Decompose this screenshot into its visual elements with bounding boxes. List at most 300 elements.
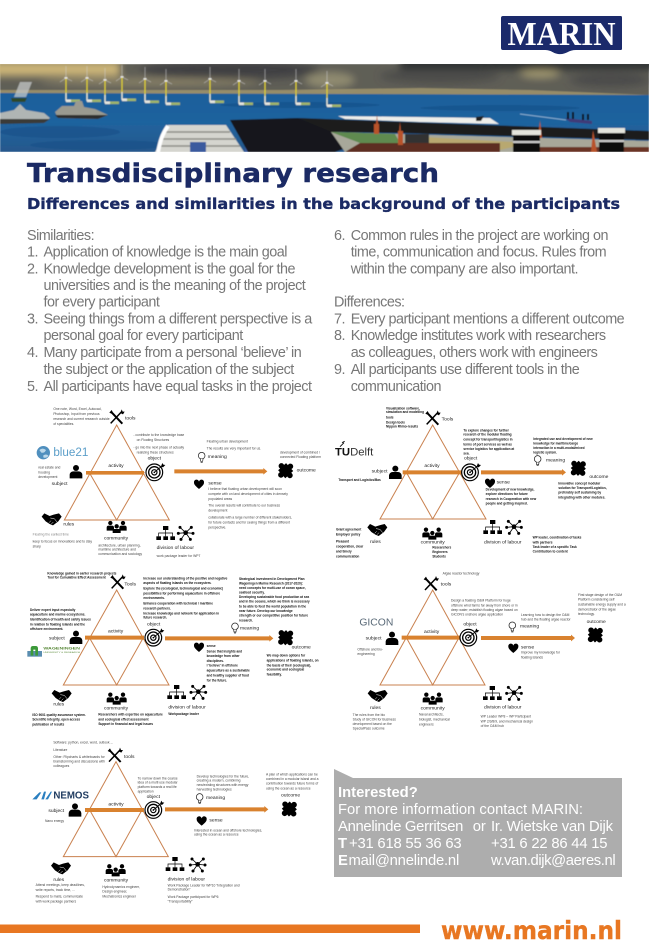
- sense note: populated areas: [208, 497, 233, 501]
- division note: with partners: [532, 540, 553, 544]
- community note: Hydrodynamics engineer,: [102, 885, 140, 889]
- text block: common rules and differences: Differences:: [334, 295, 405, 311]
- icon: target: [460, 628, 479, 646]
- subject note: housing: [38, 470, 50, 474]
- label: meaning: meaning: [206, 795, 225, 801]
- rules note: development based on the: [353, 722, 392, 726]
- arrow: activity to object: [402, 636, 462, 640]
- tools note: Design tools: [386, 420, 405, 424]
- label: meaning: meaning: [240, 626, 259, 632]
- sense note: and healthy supplier of food: [207, 673, 249, 677]
- icon: rules handshake: [42, 513, 62, 525]
- icon: tools: [424, 576, 439, 590]
- label: tools: tools: [441, 582, 452, 588]
- website url: www.marin.nl: [441, 916, 622, 945]
- object note: Increase our understanding of the positive and negative: [143, 576, 228, 580]
- text block: common rules and differences: as colleagues, others work with engineers: [351, 345, 598, 361]
- icon: community people: [107, 521, 127, 533]
- arrow: object to outcome: [481, 469, 566, 476]
- label: subject: subject: [48, 808, 65, 814]
- icon: org chart: [483, 520, 502, 534]
- sense note: for future contacts and for seeing things from a different: [208, 520, 290, 524]
- meaning note: need concepts for multi-use of ocean space,: [239, 586, 306, 590]
- object note: on Floating Structures: [137, 438, 170, 442]
- icon: org chart: [156, 526, 175, 540]
- icon: rules handshake: [367, 524, 387, 536]
- text block: similarities: Similarities:: [27, 228, 94, 244]
- division note: WP 2/3/8/9, and mechanical design: [481, 720, 533, 724]
- meaning note: interaction in a multi-modal/mixed: [533, 446, 585, 450]
- label: community: community: [421, 540, 445, 546]
- label: meaning: meaning: [520, 623, 539, 629]
- icon: meaning bulb: [196, 794, 203, 804]
- panel: contact box: [334, 769, 622, 877]
- meaning note: harvesting technologies: [197, 787, 232, 791]
- tools note: Nippon Rhino-results: [386, 424, 418, 428]
- icon: community people: [107, 692, 127, 705]
- object note: GICON’s onshore algae application: [451, 613, 503, 617]
- icon: community people: [422, 527, 442, 540]
- label: tools: tools: [125, 416, 136, 422]
- icon: meaning bulb: [198, 452, 205, 462]
- banner image: offshore floating islands: [0, 58, 649, 152]
- icon: subject person: [69, 803, 81, 817]
- meaning note: knowledge for maritime/cargo: [533, 441, 578, 445]
- icon: tools: [108, 748, 123, 762]
- logo: blue21: [37, 445, 88, 459]
- division note: Work Package participant for WP6: [168, 895, 219, 899]
- icon: outcome puzzle: [273, 625, 299, 651]
- outcome note: sustainable energy supply and a: [578, 603, 626, 607]
- outcome note: integrating with other modules.: [558, 495, 605, 499]
- rules note: Scientific integrity, open access: [32, 717, 80, 721]
- triangle diagram: [63, 762, 168, 857]
- object note: realizing these structures: [137, 450, 174, 454]
- sense note: perspective.: [208, 525, 226, 529]
- label: object: object: [147, 622, 161, 628]
- division note: Demonstration”: [168, 888, 190, 892]
- logo: NEMOS: NEMOS: [53, 791, 90, 802]
- text block: similarities: for every participant: [44, 295, 160, 311]
- tools note: One note, Word, Excel, Autocad,: [53, 407, 102, 411]
- outcome note: Platform considering self: [578, 598, 615, 602]
- outcome note: We map down options for: [267, 653, 306, 657]
- sense note: aquaculture as a sustainable: [207, 668, 250, 672]
- icon: tools: [425, 410, 441, 425]
- meaning note: Developing sustainable food production at sea: [239, 595, 309, 599]
- contact text: w.van.dijk@aeres.nl: [490, 853, 615, 869]
- division note: Workpackage leader: [168, 712, 200, 716]
- footer bar: [0, 924, 420, 933]
- subject note: development: [38, 475, 57, 479]
- text block: similarities: personal goal for every participant: [44, 328, 243, 344]
- outcome note: using the ocean as a resource: [266, 786, 311, 790]
- text block: common rules and differences: communication: [351, 379, 441, 395]
- division note: “Transportability”: [168, 900, 193, 904]
- outcome note: First stage design of the O&M: [578, 593, 622, 597]
- arrow: activity to object: [403, 470, 462, 474]
- object note: future research.: [143, 615, 167, 619]
- icon: target: [146, 463, 165, 481]
- meaning note: and in the oceans, which we think is necessary: [239, 599, 310, 603]
- rules note: The rules from the bio: [353, 713, 385, 717]
- object note: application: [138, 790, 154, 794]
- icon: subject person: [386, 632, 398, 645]
- subject note: real estate and: [38, 466, 61, 470]
- rules note: sharp: [33, 544, 41, 548]
- community note: engineers: [419, 723, 434, 727]
- rules note: and timely: [336, 549, 352, 553]
- panel: blue21 activity system: [33, 407, 321, 558]
- rules note: ISO 9001 quality assurance system.: [32, 713, 86, 717]
- rules note: publication of results: [32, 722, 64, 726]
- division note: work package leader for WP7: [157, 554, 200, 558]
- label: community: community: [104, 877, 129, 883]
- label: activity: activity: [108, 463, 124, 469]
- icon: network hub: [177, 526, 194, 541]
- text block: similarities: 5.: [27, 379, 38, 395]
- meaning note: The results are very important for us.: [207, 446, 261, 450]
- division note: of the O&M hub: [481, 724, 504, 728]
- community note: architecture, urban planning,: [98, 544, 141, 548]
- subject note: engineering: [357, 652, 375, 656]
- sense note: I believe that floating urban development will soon: [208, 487, 282, 491]
- icon: org chart: [483, 686, 502, 700]
- sense note: Improve my knowledge for: [521, 651, 561, 655]
- outcome note: preferably self sustaining by: [558, 490, 601, 494]
- icon: sense heart: [197, 816, 207, 826]
- outcome note: connected Floating platform: [280, 455, 321, 459]
- sense note: Interested in ocean and offshore technologies,: [194, 828, 262, 832]
- label: outcome: outcome: [292, 645, 311, 651]
- object note: platform towards a real life: [138, 785, 177, 789]
- subject note: Transport and Logistics/Bas: [338, 478, 381, 482]
- community note: maritime architecture and: [98, 548, 136, 552]
- meaning note: Learning how to design the O&M: [521, 613, 570, 617]
- label: community: community: [421, 706, 445, 712]
- contact text: T: [338, 836, 347, 852]
- text block: common rules and differences: Every participant mentions a different outcome: [351, 311, 625, 327]
- rules note: keep to focus on innovations and to stay: [33, 539, 92, 543]
- label: activity: activity: [424, 629, 440, 635]
- label: meaning: meaning: [208, 454, 227, 460]
- community note: Researchers with expertise on aquaculture: [98, 712, 163, 716]
- sense note: Development of new knowledge,: [486, 487, 535, 491]
- label: outcome: outcome: [297, 467, 316, 473]
- label: outcome: outcome: [589, 474, 609, 480]
- sense note: research in Cooperation with new: [486, 497, 537, 501]
- label: rules: rules: [370, 539, 381, 545]
- object note: research partners.: [143, 606, 171, 610]
- meaning note: to be able to feed the world population in the: [239, 604, 306, 608]
- rules note: SpecialPass outcome: [353, 727, 385, 731]
- icon: sense heart: [194, 480, 204, 489]
- label: sense: sense: [497, 479, 510, 485]
- icon: subject person: [389, 466, 402, 479]
- meaning note: strength or our competitive position for future: [239, 613, 308, 617]
- community note: Support in financial and legal issues: [98, 722, 153, 726]
- object note: aspects of floating islands on the ecosystem.: [143, 581, 212, 585]
- subject note: Identification of health and safety issues: [30, 617, 91, 621]
- contact text: E: [338, 853, 348, 869]
- label: sense: sense: [208, 481, 222, 487]
- triangle diagram: [64, 425, 169, 520]
- community note: Naval architects,: [419, 713, 444, 717]
- meaning note: Strategical investment in Development Plan: [239, 577, 305, 581]
- subject note: aquaculture and marine ecosystems.: [30, 612, 86, 616]
- object note: idea of a multi use modular: [138, 781, 179, 785]
- label: object: object: [463, 622, 477, 628]
- outcome note: contribution towards future forms of: [266, 782, 318, 786]
- icon: tools: [109, 409, 125, 424]
- contact text: For more information contact MARIN:: [338, 802, 583, 818]
- object note: Design a floating O&M Platform for huge: [451, 599, 511, 603]
- triangle diagram: [380, 590, 485, 685]
- sense note: Sense that insights and: [207, 649, 242, 653]
- label: rules: rules: [370, 705, 381, 711]
- community note: biologist, mechanical: [419, 718, 450, 722]
- label: sense: sense: [521, 645, 535, 651]
- sense note: The overall results will contribute to our business: [208, 504, 280, 508]
- sense note: compete with on land development of cities in densely: [208, 492, 288, 496]
- label: rules: rules: [63, 521, 75, 527]
- text block: similarities: 1.: [27, 245, 38, 261]
- meaning note: research.: [239, 618, 253, 622]
- sense note: floating islands: [521, 655, 543, 659]
- arrow: activity to object: [86, 471, 144, 475]
- icon: target: [145, 801, 164, 818]
- division note: Work Package Leader for WP10 “Integration and: [168, 883, 240, 887]
- icon: meaning bulb: [509, 622, 516, 632]
- arrow: object to outcome: [165, 635, 273, 642]
- label: division of labour: division of labour: [157, 545, 194, 551]
- outcome note: development of combined /: [280, 450, 320, 454]
- outcome note: feasibility.: [267, 672, 282, 676]
- subject note: offshore environment.: [30, 627, 63, 631]
- sense note: explore directions for future: [486, 492, 528, 496]
- icon: org chart: [167, 685, 186, 699]
- text block: similarities: All participants have equal tasks in the project: [44, 379, 312, 395]
- label: activity: activity: [424, 463, 440, 469]
- icon: outcome puzzle: [582, 622, 608, 648]
- text block: common rules and differences: Knowledge institutes work with researchers: [351, 328, 606, 344]
- tools note: Software: python, excel, word, outlook ...: [53, 741, 113, 745]
- icon: network hub: [505, 520, 523, 535]
- contact text: +31 618 55 36 63: [349, 836, 461, 852]
- text block: similarities: Many participate from a personal ‘believe’ in: [44, 345, 302, 361]
- division note: Task leader of a specific Task: [533, 545, 577, 549]
- tools note: of specialities.: [53, 422, 74, 426]
- text block: common rules and differences: within the company are also important.: [350, 261, 578, 277]
- label: tools: Tools: [124, 582, 136, 588]
- icon: outcome puzzle: [276, 796, 302, 822]
- icon: tools: [110, 574, 126, 589]
- text block: common rules and differences: All participants use different tools in the: [351, 362, 580, 378]
- rules note: Floating the earliest time: [33, 532, 69, 536]
- arrow: activity to object: [85, 808, 144, 812]
- icon: network hub: [189, 857, 206, 872]
- arrow: object to outcome: [165, 806, 268, 813]
- rules note: Attend meetings, keep deadlines,: [36, 883, 85, 887]
- text block: common rules and differences: 9.: [334, 362, 345, 378]
- text block: common rules and differences: Common rules in the project are working on: [351, 228, 609, 244]
- triangle diagram: [380, 425, 486, 519]
- contact text: +31 6 22 86 44 15: [491, 836, 607, 852]
- sense note: using the ocean as a resource: [194, 833, 239, 837]
- sense note: for the future.: [207, 678, 227, 682]
- icon: subject person: [70, 631, 82, 644]
- icon: org chart: [166, 857, 184, 871]
- community note: Engineers: [432, 550, 448, 554]
- label: subject: subject: [372, 469, 388, 475]
- tools note: Visualization software,: [386, 406, 420, 410]
- rules note: Grant agreement: [336, 527, 362, 531]
- contact text: Annelinde Gerritsen: [338, 819, 463, 835]
- object note: environments.: [143, 596, 165, 600]
- outcome note: technology.: [578, 612, 595, 616]
- tools note: Other: Flipcharts & whiteboards for: [53, 755, 106, 759]
- icon: target: [462, 463, 481, 481]
- logo: TU Delft: [335, 441, 373, 459]
- object note: Enhance cooperation with technical / maritime: [143, 601, 213, 605]
- meaning note: logistic system.: [533, 450, 557, 454]
- meaning note: creating a modern, combining: [197, 779, 241, 783]
- label: sense: sense: [209, 818, 223, 824]
- division note: WP Leader WP8 – WP Participant: [481, 715, 531, 719]
- label: rules: rules: [53, 877, 65, 883]
- text block: similarities: 2.: [27, 261, 38, 277]
- text block: similarities: universities and is the meaning of the project: [44, 278, 306, 294]
- sense note: I ‘believe’ in offshore: [207, 663, 238, 667]
- label: sense: sense: [207, 644, 216, 648]
- arrow: activity to object: [85, 636, 144, 640]
- object note: deep water; establish floating algae based on: [451, 608, 518, 612]
- icon: subject person: [70, 465, 82, 478]
- meaning note: Wageningen Marine Research (2017-2020):: [239, 581, 303, 585]
- text block: similarities: Seeing things from a different perspective is a: [44, 311, 312, 327]
- label: community: community: [104, 706, 129, 712]
- icon: target: [145, 628, 164, 646]
- sense note: people and getting inspired.: [486, 501, 528, 505]
- label: outcome: outcome: [587, 619, 606, 625]
- icon: community people: [423, 692, 443, 705]
- logo: Wageningen: WAGENINGEN: [43, 646, 80, 651]
- logo: MARIN: MARIN: [508, 16, 616, 53]
- object note: concept for transport/logistics in: [463, 437, 513, 441]
- logo: TU Delft: TUDelft: [335, 447, 373, 459]
- logo: NEMOS: [32, 791, 90, 802]
- icon: network hub: [505, 686, 523, 701]
- subtitle: Differences and similarities in the background of the participants: [27, 195, 620, 213]
- text block: common rules and differences: time, communication and focus. Rules from: [351, 245, 607, 261]
- outcome note: economic and ecological: [267, 667, 304, 671]
- logo: Wageningen: [27, 646, 81, 657]
- object note: To narrow down the coarse: [138, 776, 178, 780]
- community note: Design engineer,: [102, 890, 127, 894]
- icon: sense heart: [194, 643, 204, 652]
- label: division of labour: division of labour: [168, 877, 205, 883]
- text block: similarities: Application of knowledge is the main goal: [44, 245, 287, 261]
- logo: GICON: GICON: [359, 617, 393, 628]
- label: subject: subject: [52, 481, 68, 487]
- meaning note: near future. Develop our knowledge: [239, 609, 293, 613]
- subject note: Nano energy: [45, 819, 64, 823]
- object note: Increase knowledge and network for application in: [143, 611, 219, 615]
- label: tools: tools: [124, 754, 135, 760]
- object note: - go into the next phase of actually: [133, 445, 184, 449]
- sense note: collaborate with a large number of different stakeholders,: [208, 515, 292, 519]
- object note: - contribute to the knowledge base: [133, 433, 184, 437]
- text block: similarities: 4.: [27, 345, 38, 361]
- outcome note: Innovative concept modular: [558, 481, 601, 485]
- meaning note: hub and the floating algae reactor: [521, 617, 571, 621]
- label: object: object: [147, 794, 161, 800]
- label: object: object: [464, 455, 478, 461]
- icon: sense heart: [485, 479, 495, 488]
- meaning note: Integrated use and development of new: [533, 437, 593, 441]
- text block: similarities: Knowledge development is the goal for the: [44, 261, 295, 277]
- rules note: Respond to mails, communicate: [36, 895, 83, 899]
- icon: rules handshake: [52, 690, 72, 702]
- text block: similarities: 3.: [27, 311, 38, 327]
- object note: terms of port services as well as: [463, 442, 512, 446]
- text block: similarities: the subject or the application of the subject: [44, 362, 294, 378]
- meaning note: Floating urban development: [207, 440, 248, 444]
- tools note: colleagues: [53, 764, 70, 768]
- label: meaning: meaning: [546, 458, 565, 464]
- subject note: Deliver expert input especially: [30, 608, 76, 612]
- community note: Mechatronics engineer: [102, 894, 137, 898]
- label: activity: activity: [108, 801, 124, 807]
- community note: Students: [432, 554, 446, 558]
- tools note: Literature: [53, 748, 68, 752]
- arrow: object to outcome: [481, 635, 575, 641]
- contact text: or: [473, 819, 486, 835]
- icon: outcome puzzle: [273, 458, 299, 484]
- rules note: Employer policy: [336, 532, 361, 536]
- arrow: object to outcome: [174, 468, 267, 475]
- tools note: Tool for Cumulative Effect Assessment: [47, 575, 107, 579]
- icon: sense heart: [508, 644, 518, 653]
- outcome note: solution for Transport/Logistics,: [558, 486, 607, 490]
- sense note: development: [208, 508, 227, 512]
- meaning note: new/existing structures with energy: [197, 783, 249, 787]
- outcome note: demonstrator of the algae: [578, 607, 616, 611]
- outcome note: A plan of which applications can be: [266, 772, 318, 776]
- meaning note: Develop technologies for the future,: [197, 774, 249, 778]
- sense note: knowledge from other: [207, 654, 240, 658]
- label: subject: subject: [366, 636, 382, 642]
- object note: offshore wind farms far away from shore or in: [451, 603, 518, 607]
- rules note: Pleasant: [336, 539, 350, 543]
- panel: Wageningen activity system: [27, 571, 319, 726]
- tools note: simulation and modelling: [386, 410, 424, 414]
- label: outcome: outcome: [281, 792, 300, 798]
- label: activity: activity: [108, 628, 124, 634]
- community note: Researchers: [432, 545, 452, 549]
- icon: meaning bulb: [232, 623, 238, 633]
- outcome note: combined in a modular island and a: [266, 777, 319, 781]
- rules note: with work package partners: [36, 900, 77, 904]
- object note: sea.: [463, 451, 470, 455]
- tools note: Knowledge gained in earlier research projects: [47, 571, 117, 575]
- rules note: cooperation, clear: [336, 544, 364, 548]
- rules note: Study of GICON for Business: [353, 718, 396, 722]
- label: division of labour: division of labour: [484, 540, 522, 546]
- label: tools: Tools: [442, 417, 454, 423]
- icon: network hub: [189, 685, 207, 700]
- rules note: write reports, track time, ...: [36, 888, 75, 892]
